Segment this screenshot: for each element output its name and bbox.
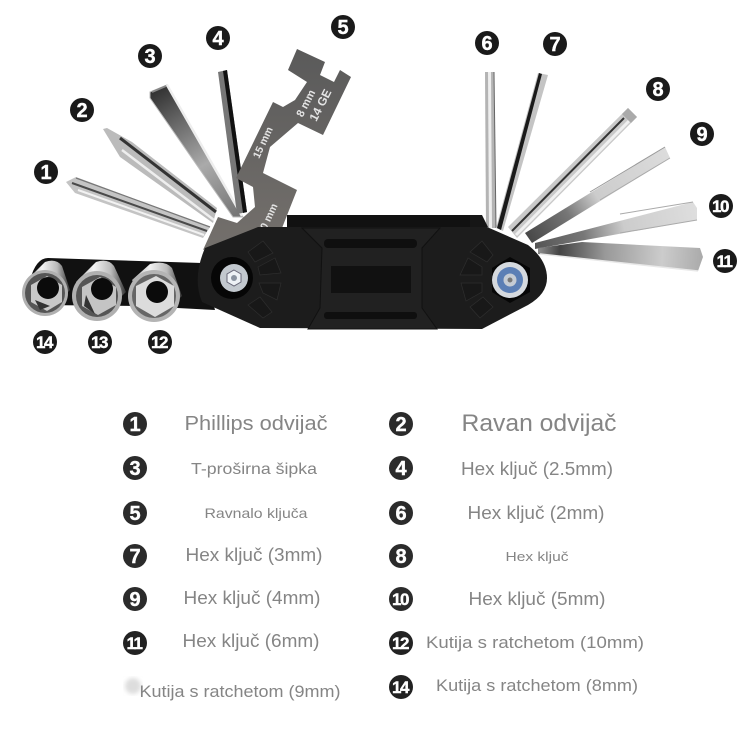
handle centre panel — [302, 228, 440, 329]
tool 3: T-extension bar — [150, 85, 243, 217]
tool 6: hex key 2mm — [485, 72, 496, 228]
marker 14 — [33, 330, 57, 354]
tool 2: flat screwdriver — [103, 128, 217, 223]
legend item 3 — [123, 456, 317, 480]
marker 5 — [331, 15, 355, 39]
callout numbers on illustration — [33, 15, 737, 354]
marker 1: 1 — [40, 162, 52, 184]
marker 4 — [206, 26, 230, 50]
legend item 8: Hex ključ — [506, 549, 569, 564]
marker 10: 10 — [712, 197, 729, 216]
marker 5: 5 — [337, 17, 349, 39]
legend — [123, 410, 644, 701]
left socket arm — [30, 258, 215, 310]
legend item 14 — [389, 675, 638, 699]
tool 1: Phillips screwdriver — [66, 177, 210, 238]
marker 10 — [709, 194, 733, 218]
tool 7: hex key 3mm — [496, 73, 548, 231]
marker 12 — [148, 330, 172, 354]
left bolt — [211, 257, 253, 299]
marker 8: 8 — [652, 79, 664, 101]
marker 2 — [70, 98, 94, 122]
marker 12: 12 — [151, 333, 168, 352]
legend item 14: Kutija s ratchetom (8mm) — [436, 677, 638, 695]
legend item 11 — [123, 631, 320, 655]
multi-tool illustration — [22, 49, 703, 329]
wrench label 0 mm: 0 mm — [258, 202, 281, 232]
marker 9: 9 — [696, 124, 708, 146]
marker 13 — [88, 330, 112, 354]
handle grip ribs left — [248, 241, 281, 318]
socket 12 — [128, 263, 182, 322]
legend item 9: 9 — [129, 589, 141, 611]
legend item 9 — [123, 587, 320, 611]
tool 10: hex key 5mm — [535, 202, 697, 249]
legend item 5: Ravnalo ključa — [204, 505, 308, 521]
marker 8 — [646, 77, 670, 101]
legend item 8: 8 — [395, 546, 407, 568]
marker 6 — [475, 31, 499, 55]
tool 5: wrench plate — [203, 49, 351, 250]
wrench label 15 mm: 15 mm — [251, 125, 276, 160]
marker 4: 4 — [212, 28, 224, 50]
legend item 4: Hex ključ (2.5mm) — [461, 459, 613, 479]
tool 11: hex key 6mm — [538, 242, 703, 271]
legend item 1: Phillips odvijač — [184, 413, 328, 435]
legend item 1: 1 — [129, 414, 141, 436]
marker 11: 11 — [717, 252, 733, 271]
marker 11 — [713, 249, 737, 273]
legend item 12 — [389, 631, 644, 655]
legend item 11: Hex ključ (6mm) — [182, 631, 320, 651]
marker 3: 3 — [144, 46, 156, 68]
legend item 7: 7 — [129, 546, 141, 568]
marker 7 — [543, 32, 567, 56]
legend item 5: 5 — [129, 503, 141, 525]
tool 9: hex key 4mm — [525, 147, 670, 243]
legend item 8 — [389, 544, 569, 568]
legend item 2: 2 — [395, 414, 407, 436]
legend item 7 — [123, 544, 322, 568]
legend item 11: 11 — [127, 634, 143, 653]
legend item 12: 12 — [392, 634, 409, 653]
legend item 3: 3 — [129, 458, 141, 480]
marker 2: 2 — [76, 100, 88, 122]
socket 13 — [72, 261, 126, 321]
legend item 12: Kutija s ratchetom (10mm) — [426, 633, 644, 652]
marker 6: 6 — [481, 33, 493, 55]
socket 14 — [22, 261, 70, 316]
right bolt — [492, 257, 530, 303]
legend item 6 — [389, 501, 604, 525]
marker 1 — [34, 160, 58, 184]
marker 9 — [690, 122, 714, 146]
legend item 4: 4 — [395, 458, 407, 480]
marker 13: 13 — [91, 333, 108, 352]
legend item 4 — [389, 456, 613, 480]
legend item 10 — [389, 587, 606, 611]
legend item 9: Hex ključ (4mm) — [184, 588, 320, 608]
legend item 13: Kutija s ratchetom (9mm) — [140, 683, 340, 701]
handle grip ribs right — [460, 241, 493, 318]
legend item 13 — [125, 678, 340, 701]
marker 14: 14 — [36, 333, 54, 352]
legend item 6: Hex ključ (2mm) — [468, 503, 604, 523]
legend item 2 — [389, 410, 616, 437]
legend item 3: T-proširna šipka — [191, 461, 317, 478]
legend item 10: 10 — [392, 590, 409, 609]
legend item 2: Ravan odvijač — [462, 410, 616, 437]
legend item 1 — [123, 412, 328, 436]
wrench label 8 mm: 8 mm — [294, 88, 318, 119]
marker 7: 7 — [549, 34, 561, 56]
wrench label 14 GE: 14 GE — [306, 87, 334, 124]
legend item 5 — [123, 501, 308, 525]
main handle body — [198, 215, 547, 329]
legend item 10: Hex ključ (5mm) — [468, 589, 606, 609]
tool 4: hex key 2.5mm — [218, 70, 247, 214]
marker 3 — [138, 44, 162, 68]
tool 8: torx key — [508, 108, 637, 238]
legend item 6: 6 — [395, 503, 407, 525]
legend item 14: 14 — [392, 678, 410, 697]
legend item 7: Hex ključ (3mm) — [186, 545, 322, 565]
